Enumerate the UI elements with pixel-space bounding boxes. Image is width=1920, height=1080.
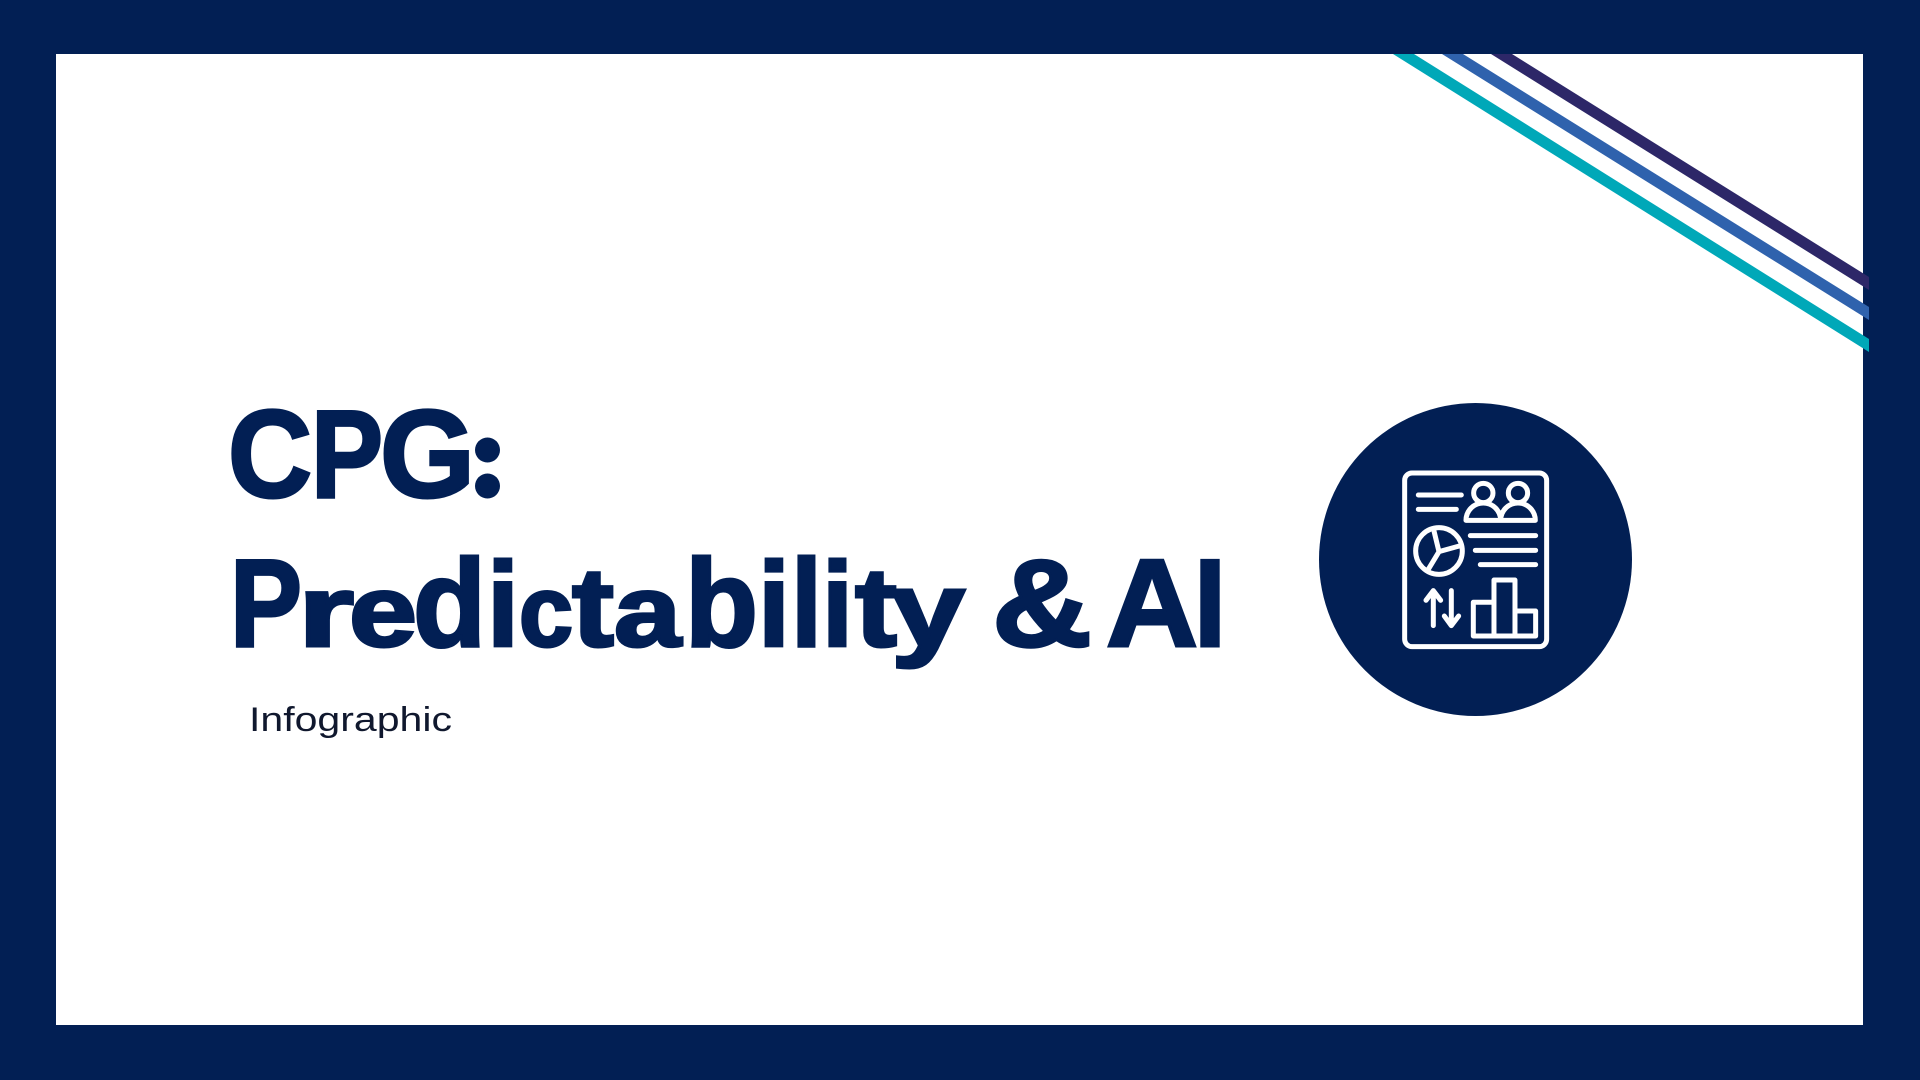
subtitle: Infographic	[249, 701, 452, 739]
title line 2: b	[685, 535, 758, 673]
title line 2: P	[230, 535, 302, 673]
pie chart	[1416, 528, 1462, 574]
title line 2: e	[349, 556, 417, 668]
title line 2: i	[758, 538, 790, 672]
header text lines	[1418, 495, 1461, 509]
title colon round dots	[475, 438, 500, 498]
title line 2: l	[791, 535, 822, 673]
title line 2: c	[519, 556, 573, 668]
title line 1: P	[311, 386, 383, 524]
title line 2: d	[413, 535, 486, 673]
title line 1: C	[228, 386, 312, 524]
title line 2: A	[1106, 535, 1198, 673]
icon background circle	[1319, 403, 1632, 716]
title line 2: I	[1194, 535, 1226, 673]
title line 2: &	[992, 535, 1092, 673]
decorative diagonal stripes, top right	[1393, 54, 1869, 352]
title line 2: t	[855, 545, 897, 670]
title line 2: t	[572, 545, 614, 670]
body text lines	[1470, 536, 1536, 565]
title line 1: :	[476, 410, 500, 512]
title line 1: G	[380, 386, 475, 524]
people	[1466, 483, 1535, 520]
title line 2: r	[298, 556, 354, 668]
icon: report in navy circle	[1319, 403, 1632, 716]
document outline	[1405, 473, 1547, 647]
icon: report document glyph	[1405, 473, 1547, 647]
title line 2: y	[891, 551, 965, 669]
title line 2: a	[614, 556, 682, 668]
bar chart	[1473, 580, 1536, 636]
title line 2: i	[822, 538, 853, 672]
up and down arrows	[1426, 591, 1459, 626]
title line 2: i	[487, 538, 519, 672]
